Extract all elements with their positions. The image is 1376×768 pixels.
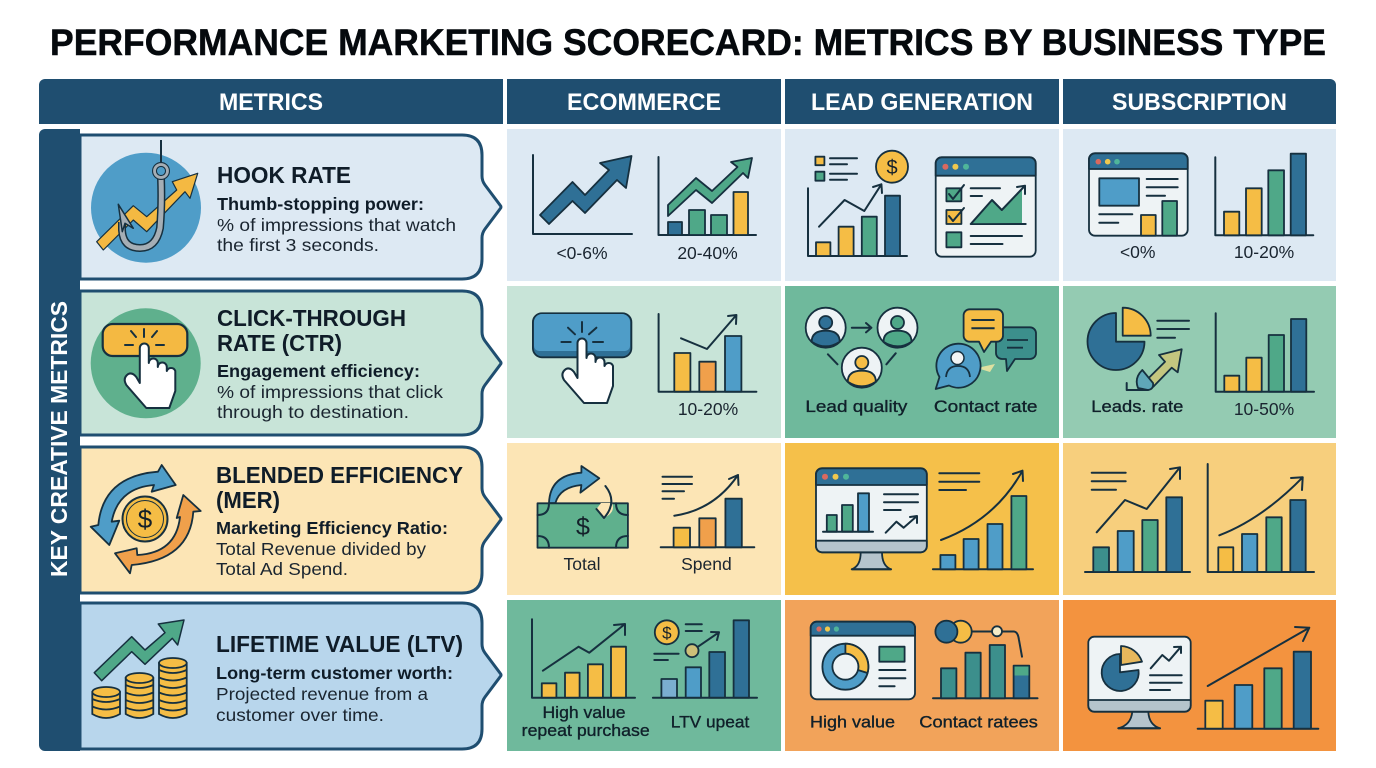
panel: hook rate xyxy=(80,135,501,279)
icon: circular arrows around coin xyxy=(91,465,201,573)
icon: chat bubbles xyxy=(936,309,1036,389)
panel: blended efficiency xyxy=(80,447,501,593)
table header row xyxy=(39,79,1336,124)
header: lead generation xyxy=(785,79,1059,124)
icon: browser dashboard xyxy=(1089,153,1188,236)
text: hook rate: Thumb-stopping power: xyxy=(217,194,424,214)
header: subscription xyxy=(1063,79,1336,124)
cell: ctr, subscription xyxy=(1063,286,1336,438)
text: click-through rate: % of impressions that click xyxy=(217,382,443,402)
label: Lead quality xyxy=(805,397,908,416)
chart: four rising bars xyxy=(1215,154,1313,235)
chart: bars with connector xyxy=(933,621,1038,698)
text: lifetime value: Long-term customer worth: xyxy=(216,663,453,683)
header: ecommerce: ECOMMERCE xyxy=(567,89,721,116)
icon: browser checklist xyxy=(936,157,1036,257)
cell: ltv, lead generation xyxy=(785,600,1059,751)
text: blended efficiency xyxy=(216,462,463,579)
icon: circular arrows around coin: $ xyxy=(138,504,153,534)
cell: hook rate, lead generation xyxy=(785,129,1059,281)
label: High value xyxy=(810,712,895,732)
cell: ltv, subscription xyxy=(1063,600,1336,751)
header: metrics: METRICS xyxy=(219,89,323,116)
text: hook rate: % of impressions that watch xyxy=(217,215,456,235)
text: click-through rate xyxy=(217,305,443,422)
label: 10-20% xyxy=(1234,242,1294,262)
side bar: key creative metrics: KEY CREATIVE METRICS xyxy=(46,301,72,577)
icon: desktop monitor dashboard xyxy=(816,468,927,569)
chart: bars with arrow xyxy=(658,157,756,235)
text: click-through rate: through to destination. xyxy=(217,402,409,422)
chart: yellow bars with arrow xyxy=(532,619,635,698)
cell: ltv, ecommerce xyxy=(507,600,781,751)
icon: desktop monitor with pie chart xyxy=(1088,637,1191,728)
label: Total xyxy=(564,554,600,574)
label: 10-50% xyxy=(1234,399,1294,419)
label: Contact ratees xyxy=(919,712,1038,732)
header: metrics xyxy=(39,79,503,124)
text: hook rate: the first 3 seconds. xyxy=(217,235,379,255)
icon: clicking hand on yellow button xyxy=(91,308,201,418)
chart: rising bars with curve xyxy=(933,471,1033,569)
chart: coin and blue bars: $ xyxy=(662,624,672,642)
label: LTV upeat xyxy=(671,712,750,732)
cell: mer, lead generation xyxy=(785,443,1059,595)
text: click-through rate: RATE (CTR) xyxy=(217,330,342,356)
panel: click-through rate xyxy=(80,291,501,435)
text: blended efficiency: BLENDED EFFICIENCY xyxy=(216,462,463,488)
text: click-through rate: Engagement efficiency: xyxy=(217,361,420,381)
header: ecommerce xyxy=(507,79,781,124)
header: subscription: SUBSCRIPTION xyxy=(1112,89,1287,116)
chart: rising bars with arrow xyxy=(1198,627,1318,729)
text: click-through rate: CLICK-THROUGH xyxy=(217,305,406,331)
label: High value xyxy=(542,703,626,722)
chart: rising arrow xyxy=(533,155,632,234)
label: <0% xyxy=(1120,242,1155,262)
chart: bars with curve xyxy=(1208,464,1314,572)
text: blended efficiency: Marketing Efficiency Ratio: xyxy=(216,518,448,538)
chart: coin and blue bars xyxy=(653,620,757,698)
cell: ctr, ecommerce xyxy=(507,286,781,438)
text: lifetime value: customer over time. xyxy=(216,705,384,725)
cell: hook rate, subscription xyxy=(1063,129,1336,281)
panel: lifetime value xyxy=(80,603,501,749)
label: repeat purchase xyxy=(522,721,650,740)
icon: coin stacks with rising arrow xyxy=(92,620,187,718)
title: PERFORMANCE MARKETING SCORECARD: METRICS BY BUSINESS TYPE xyxy=(50,21,1326,63)
chart: spend bars xyxy=(661,475,754,547)
cell: ctr, lead generation xyxy=(785,286,1059,438)
label: <0-6% xyxy=(556,243,608,263)
chart: bars with trend arrow xyxy=(659,314,756,392)
text: blended efficiency: Total Ad Spend. xyxy=(216,559,348,579)
chart: list, coin and bars: $ xyxy=(886,157,898,179)
label: Contact rate xyxy=(934,397,1038,416)
chart: list, coin and bars xyxy=(808,151,908,256)
text: lifetime value xyxy=(216,631,463,725)
icon: blue button with hand xyxy=(533,313,631,403)
icon: fish hook with arrow xyxy=(91,140,201,263)
text: hook rate: HOOK RATE xyxy=(217,162,351,188)
icon: pie chart with arrow xyxy=(1088,308,1189,390)
cell: mer, subscription xyxy=(1063,443,1336,595)
label: 10-20% xyxy=(678,399,738,419)
label: 20-40% xyxy=(677,243,738,263)
text: blended efficiency: Total Revenue divided by xyxy=(216,539,426,559)
chart: rising bars xyxy=(1216,313,1314,392)
icon: banknote with arrow: $ xyxy=(576,513,590,541)
cell: mer, ecommerce xyxy=(507,443,781,595)
text: lifetime value: LIFETIME VALUE (LTV) xyxy=(216,631,463,657)
header: lead generation: LEAD GENERATION xyxy=(811,89,1033,116)
icon: banknote with arrow xyxy=(538,466,628,548)
label: Leads. rate xyxy=(1091,397,1183,416)
icon: browser with donut chart xyxy=(811,622,915,699)
chart: bars with zigzag arrow xyxy=(1085,467,1190,572)
text: hook rate xyxy=(217,162,456,255)
text: lifetime value: Projected revenue from a xyxy=(216,684,428,704)
side bar: key creative metrics xyxy=(39,129,80,751)
label: Spend xyxy=(681,554,732,574)
text: blended efficiency: (MER) xyxy=(216,487,280,513)
cell: hook rate, ecommerce xyxy=(507,129,781,281)
icon: lead network avatars xyxy=(806,308,918,388)
